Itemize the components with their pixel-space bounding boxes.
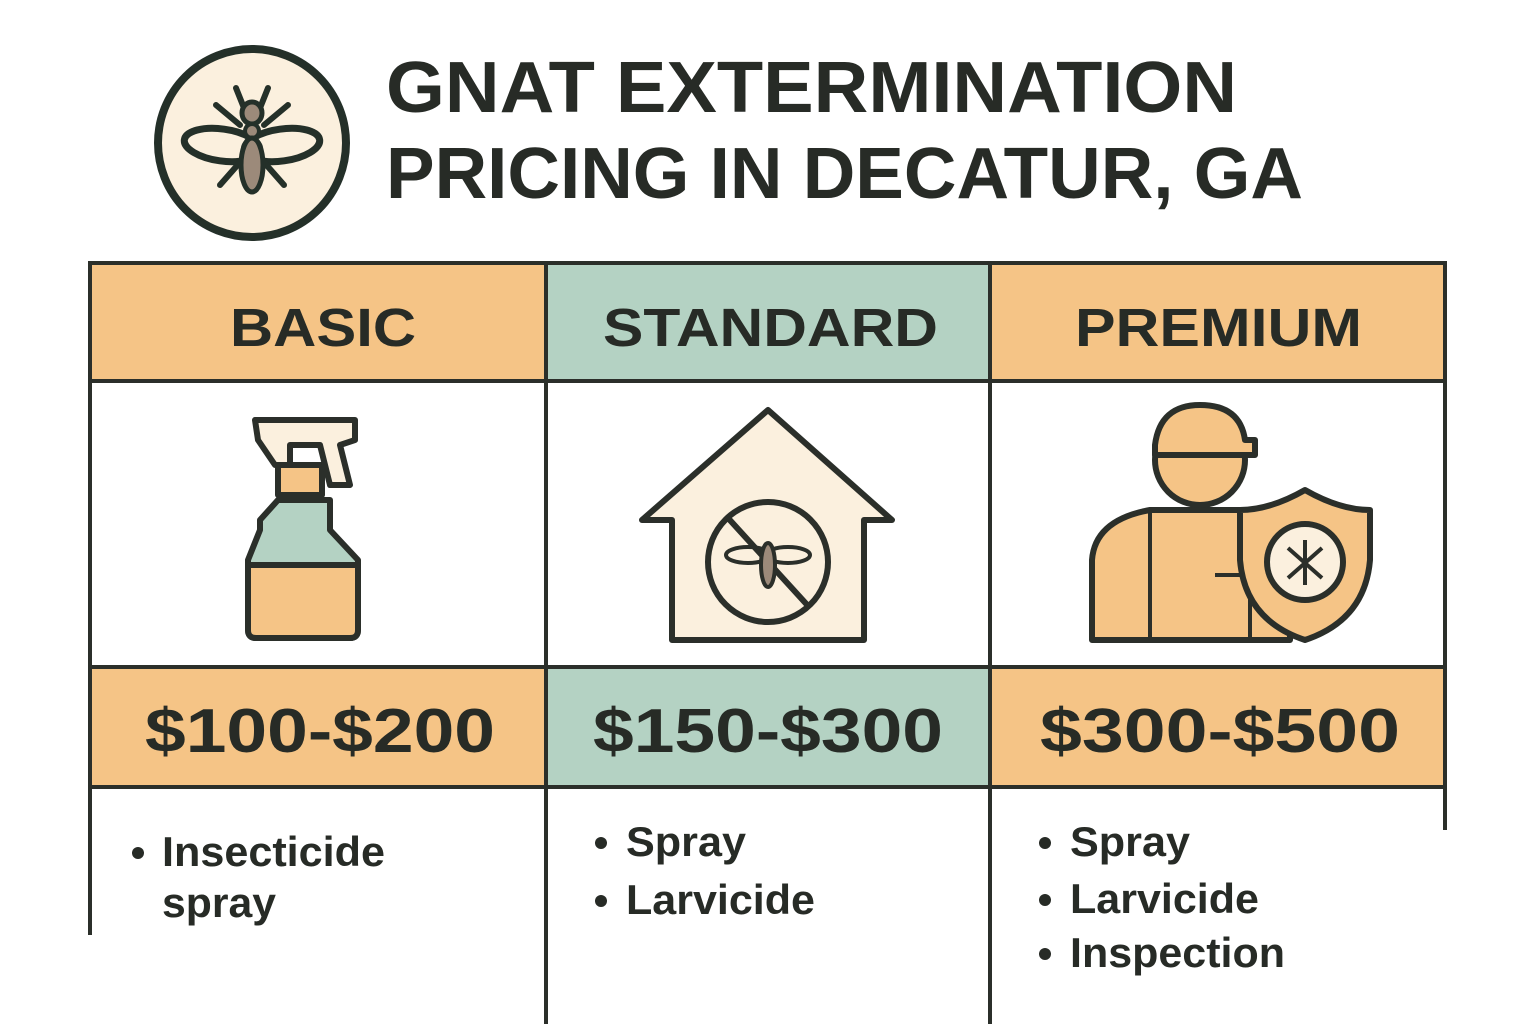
icon: house with gnat (642, 410, 892, 640)
text: standard features: Spray (626, 818, 747, 865)
icon: technician with shield (1092, 405, 1370, 640)
price cells (90, 667, 1447, 787)
header cells (90, 265, 1447, 381)
icon: spray bottle (248, 420, 358, 638)
panel: pricing table (88, 263, 1447, 1024)
title: PRICING IN DECATUR, GA (386, 134, 1303, 214)
text: premium features: Inspection (1070, 929, 1285, 976)
text: premium features: Larvicide (1070, 875, 1259, 922)
header cells: PREMIUM (1075, 298, 1362, 358)
header cells: BASIC (230, 298, 416, 358)
title: GNAT EXTERMINATION (386, 48, 1237, 128)
title (386, 48, 1303, 214)
text: standard features: Larvicide (626, 876, 815, 923)
text: premium features (1039, 818, 1285, 976)
text: basic features: Insecticide (162, 828, 385, 875)
text: basic features (132, 828, 385, 926)
price cells: $300-$500 (1040, 697, 1400, 766)
price cells: $100-$200 (145, 697, 495, 766)
text: standard features (595, 818, 815, 923)
price cells: $150-$300 (593, 697, 943, 766)
text: basic features: spray (162, 879, 277, 926)
header cells: STANDARD (603, 298, 938, 358)
text: premium features: Spray (1070, 818, 1191, 865)
icon: gnat logo (158, 49, 346, 237)
